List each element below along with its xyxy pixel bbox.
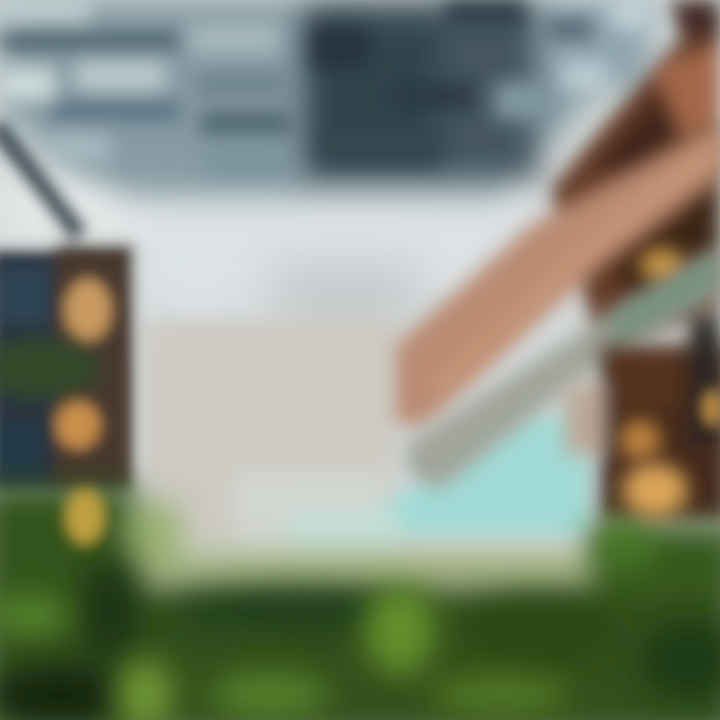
beam: peach timber diagonal: [395, 125, 720, 425]
panel: central pale wall: [145, 320, 395, 550]
window: glowing amber: [640, 249, 684, 281]
panel: right upper timber structure: [395, 0, 720, 490]
window: amber middle right: [620, 420, 660, 460]
icon: dark diagonal strut: [0, 125, 80, 235]
foliage on left building: [0, 338, 100, 398]
panel: glass canopy roof: [0, 0, 660, 195]
panel: right lower dark building: [565, 315, 720, 520]
window: amber lower right: [623, 464, 687, 516]
window: lower left amber: [65, 489, 105, 545]
sky haze: [0, 170, 550, 320]
panel: foreground greenery: [0, 485, 720, 720]
window: middle: [55, 400, 101, 450]
panel: left dark building: [0, 245, 133, 490]
window: upper: [64, 278, 112, 342]
beam: green-grey lower band: [405, 250, 720, 490]
panel: cyan glass facade: [290, 410, 590, 550]
window: amber far right: [703, 390, 720, 426]
